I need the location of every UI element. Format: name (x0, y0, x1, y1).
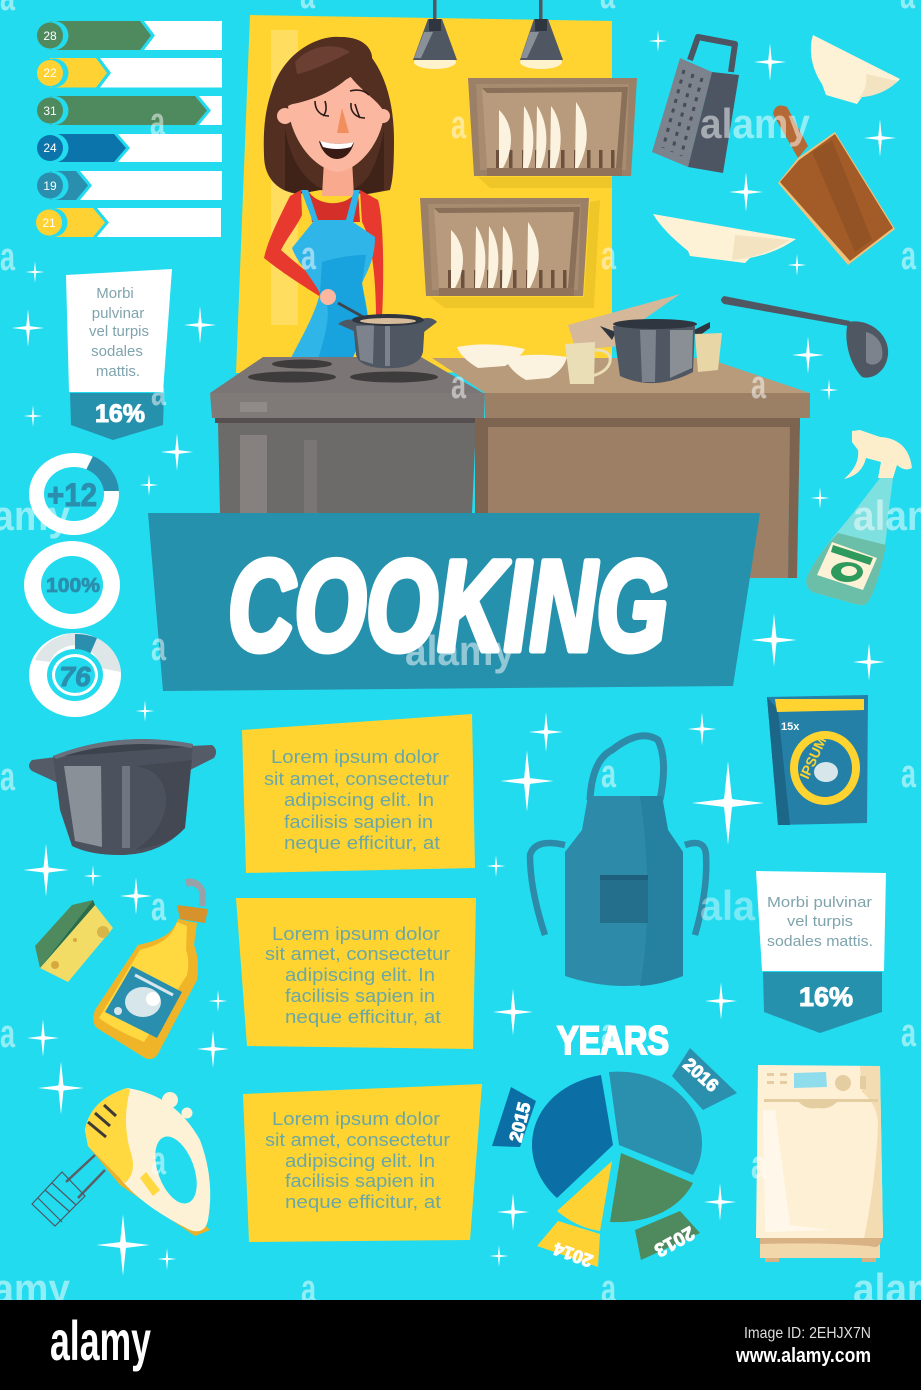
donut: +12: +12 (47, 477, 97, 513)
chart title: YEARS (557, 1019, 669, 1063)
panel: text block 1: sit amet, consectetur (264, 768, 449, 789)
icon: apron (530, 736, 706, 986)
footer image id: Image ID: 2EHJX7N (744, 1325, 871, 1342)
donut: 100% (24, 541, 120, 629)
eyes (315, 90, 369, 118)
callout: note with 16 percent (left): pulvinar (92, 305, 144, 322)
callout: note with 16 percent (right) (756, 871, 886, 1033)
neck (322, 160, 354, 196)
bowl on counter (457, 344, 525, 368)
slice 2014 (557, 1161, 612, 1231)
woman cooking (264, 37, 394, 360)
kitchen wall: yellow panel (236, 15, 612, 373)
bar 24: 24 (43, 141, 57, 155)
watermark overlay: a (0, 1012, 16, 1056)
panel: text block 1: Lorem ipsum dolor (271, 746, 439, 767)
label 2014: 2014 (551, 1239, 595, 1271)
icon: cereal box (767, 695, 868, 825)
icon: plate (653, 214, 796, 263)
bar 31 (37, 96, 211, 125)
icon: dish soap bottle (93, 879, 208, 1059)
icon: spray bottle (806, 430, 912, 605)
icon: hand mixer (32, 1088, 210, 1236)
watermark overlay: a (601, 1267, 617, 1311)
panel: text block 3: sit amet, consectetur (265, 1129, 450, 1150)
bar 21 (36, 208, 109, 237)
panel: text block 2 (236, 898, 476, 1049)
bar 28 (37, 21, 155, 50)
bar 21: 21 (42, 216, 56, 230)
watermark overlay: a (601, 234, 617, 278)
label 2013 (635, 1211, 700, 1260)
small cup on counter (695, 333, 722, 372)
right sleeve (360, 190, 383, 318)
bar 22 (37, 58, 111, 88)
icon: grater (652, 37, 739, 173)
main banner (148, 513, 760, 691)
watermark overlay: ala (700, 882, 756, 929)
bar 19 (37, 171, 92, 200)
watermark overlay: a (150, 100, 166, 144)
footer url: www.alamy.com (735, 1345, 871, 1367)
hair back (264, 37, 394, 194)
kitchen counter (432, 358, 810, 578)
icon: ladle (721, 296, 888, 378)
panel: text block 1 (242, 714, 475, 873)
mouth (319, 141, 354, 159)
icon: dishwasher (756, 1065, 883, 1262)
donut: 100%: 100% (46, 575, 100, 597)
icon: cutting board (773, 106, 895, 265)
fringe (272, 37, 372, 106)
spoon (338, 303, 365, 318)
watermark overlay: alamy (700, 100, 811, 147)
title: COOKING (228, 535, 668, 678)
apron (291, 190, 375, 360)
pot on counter (600, 319, 710, 383)
donut: +12 (29, 453, 119, 535)
watermark overlay: a (451, 363, 467, 407)
donut: 76: 76 (59, 661, 91, 692)
left arm sleeve (264, 190, 328, 298)
slice 2016 (609, 1072, 702, 1175)
icon: stock pot (29, 739, 216, 855)
mug on counter (565, 342, 610, 384)
watermark overlay: a (151, 625, 167, 669)
hand (320, 289, 336, 305)
pie chart: years (492, 1019, 737, 1271)
callout: note with 16 percent (left): 16% (95, 400, 145, 428)
panel: text block 1: facilisis sapien in (284, 811, 433, 832)
footer logo: alamy (50, 1309, 151, 1372)
panel: text block 3: facilisis sapien in (285, 1170, 435, 1191)
hair shadow (285, 127, 384, 194)
shelf with plates (lower) (420, 198, 589, 296)
slice 2013 (610, 1153, 693, 1222)
watermark overlay: a (0, 235, 16, 279)
bar 28: 28 (43, 29, 57, 43)
icon: sponge (35, 900, 113, 982)
stove (210, 357, 485, 513)
label 2016: 2016 (679, 1054, 722, 1096)
callout: note with 16 percent (left): sodales (91, 343, 143, 360)
watermark overlay: a (301, 234, 317, 278)
panel: text block 2: Lorem ipsum dolor (272, 923, 440, 944)
watermark overlay: alamy (405, 627, 516, 674)
icon: bowl (811, 35, 900, 104)
panel: text block 3: neque efficitur, at (285, 1191, 441, 1212)
lamp right (520, 0, 563, 69)
face (288, 76, 384, 172)
label 2015: 2015 (505, 1100, 535, 1144)
label 2015 (492, 1087, 536, 1147)
panel: text block 2: adipiscing elit. In (285, 964, 435, 985)
watermark overlay: a (451, 103, 467, 147)
top collar (308, 190, 360, 222)
slice 2015 (532, 1075, 613, 1198)
donut: 76 (29, 633, 121, 717)
nose (337, 108, 349, 133)
icon: cereal box: 15x (781, 721, 800, 733)
panel: horizontal bar chart (36, 21, 222, 237)
panel: text block 2: facilisis sapien in (285, 985, 435, 1006)
watermark overlay: a (601, 752, 617, 796)
bar 19: 19 (43, 179, 57, 193)
watermark overlay: a (151, 370, 167, 414)
callout: note with 16 percent (left): mattis. (96, 363, 140, 380)
callout: note with 16 percent (left): vel turpis (89, 323, 149, 340)
panel: text block 2: sit amet, consectetur (265, 943, 450, 964)
cooking pot on stove (338, 314, 437, 368)
cloth stack on counter (568, 294, 680, 350)
bar 31: 31 (43, 104, 57, 118)
watermark overlay: a (751, 363, 767, 407)
icon: cereal box: IPSUM (796, 734, 829, 781)
watermark overlay: a (0, 755, 16, 799)
second bowl on counter (505, 355, 567, 380)
label 2016 (672, 1048, 737, 1110)
lamp left (413, 0, 457, 69)
watermark overlay: a (301, 1267, 317, 1311)
watermark overlay: a (151, 1139, 167, 1183)
callout: note with 16 percent (right): Morbi pulvinar (767, 895, 872, 911)
label 2014 (537, 1221, 600, 1271)
footer bar (0, 1300, 921, 1390)
shelf with plates (upper) (468, 78, 637, 176)
callout: note with 16 percent (left): Morbi (96, 285, 134, 302)
watermark overlay: a (601, 1011, 617, 1055)
panel: text block 2: neque efficitur, at (285, 1006, 441, 1027)
watermark overlay: a (151, 885, 167, 929)
panel: text block 3: adipiscing elit. In (285, 1150, 435, 1171)
callout: note with 16 percent (right): 16% (799, 982, 853, 1012)
callout: note with 16 percent (left) (66, 269, 172, 440)
panel: text block 3: Lorem ipsum dolor (272, 1108, 440, 1129)
bar 22: 22 (43, 66, 57, 80)
label 2013: 2013 (651, 1222, 698, 1260)
panel: text block 1: adipiscing elit. In (284, 789, 434, 810)
panel: text block 3 (243, 1084, 482, 1242)
panel: text block 1: neque efficitur, at (284, 832, 440, 853)
callout: note with 16 percent (right): sodales mattis. (767, 934, 873, 950)
watermark overlay: a (751, 1143, 767, 1187)
callout: note with 16 percent (right): vel turpis (787, 914, 853, 930)
bar 24 (37, 134, 130, 162)
